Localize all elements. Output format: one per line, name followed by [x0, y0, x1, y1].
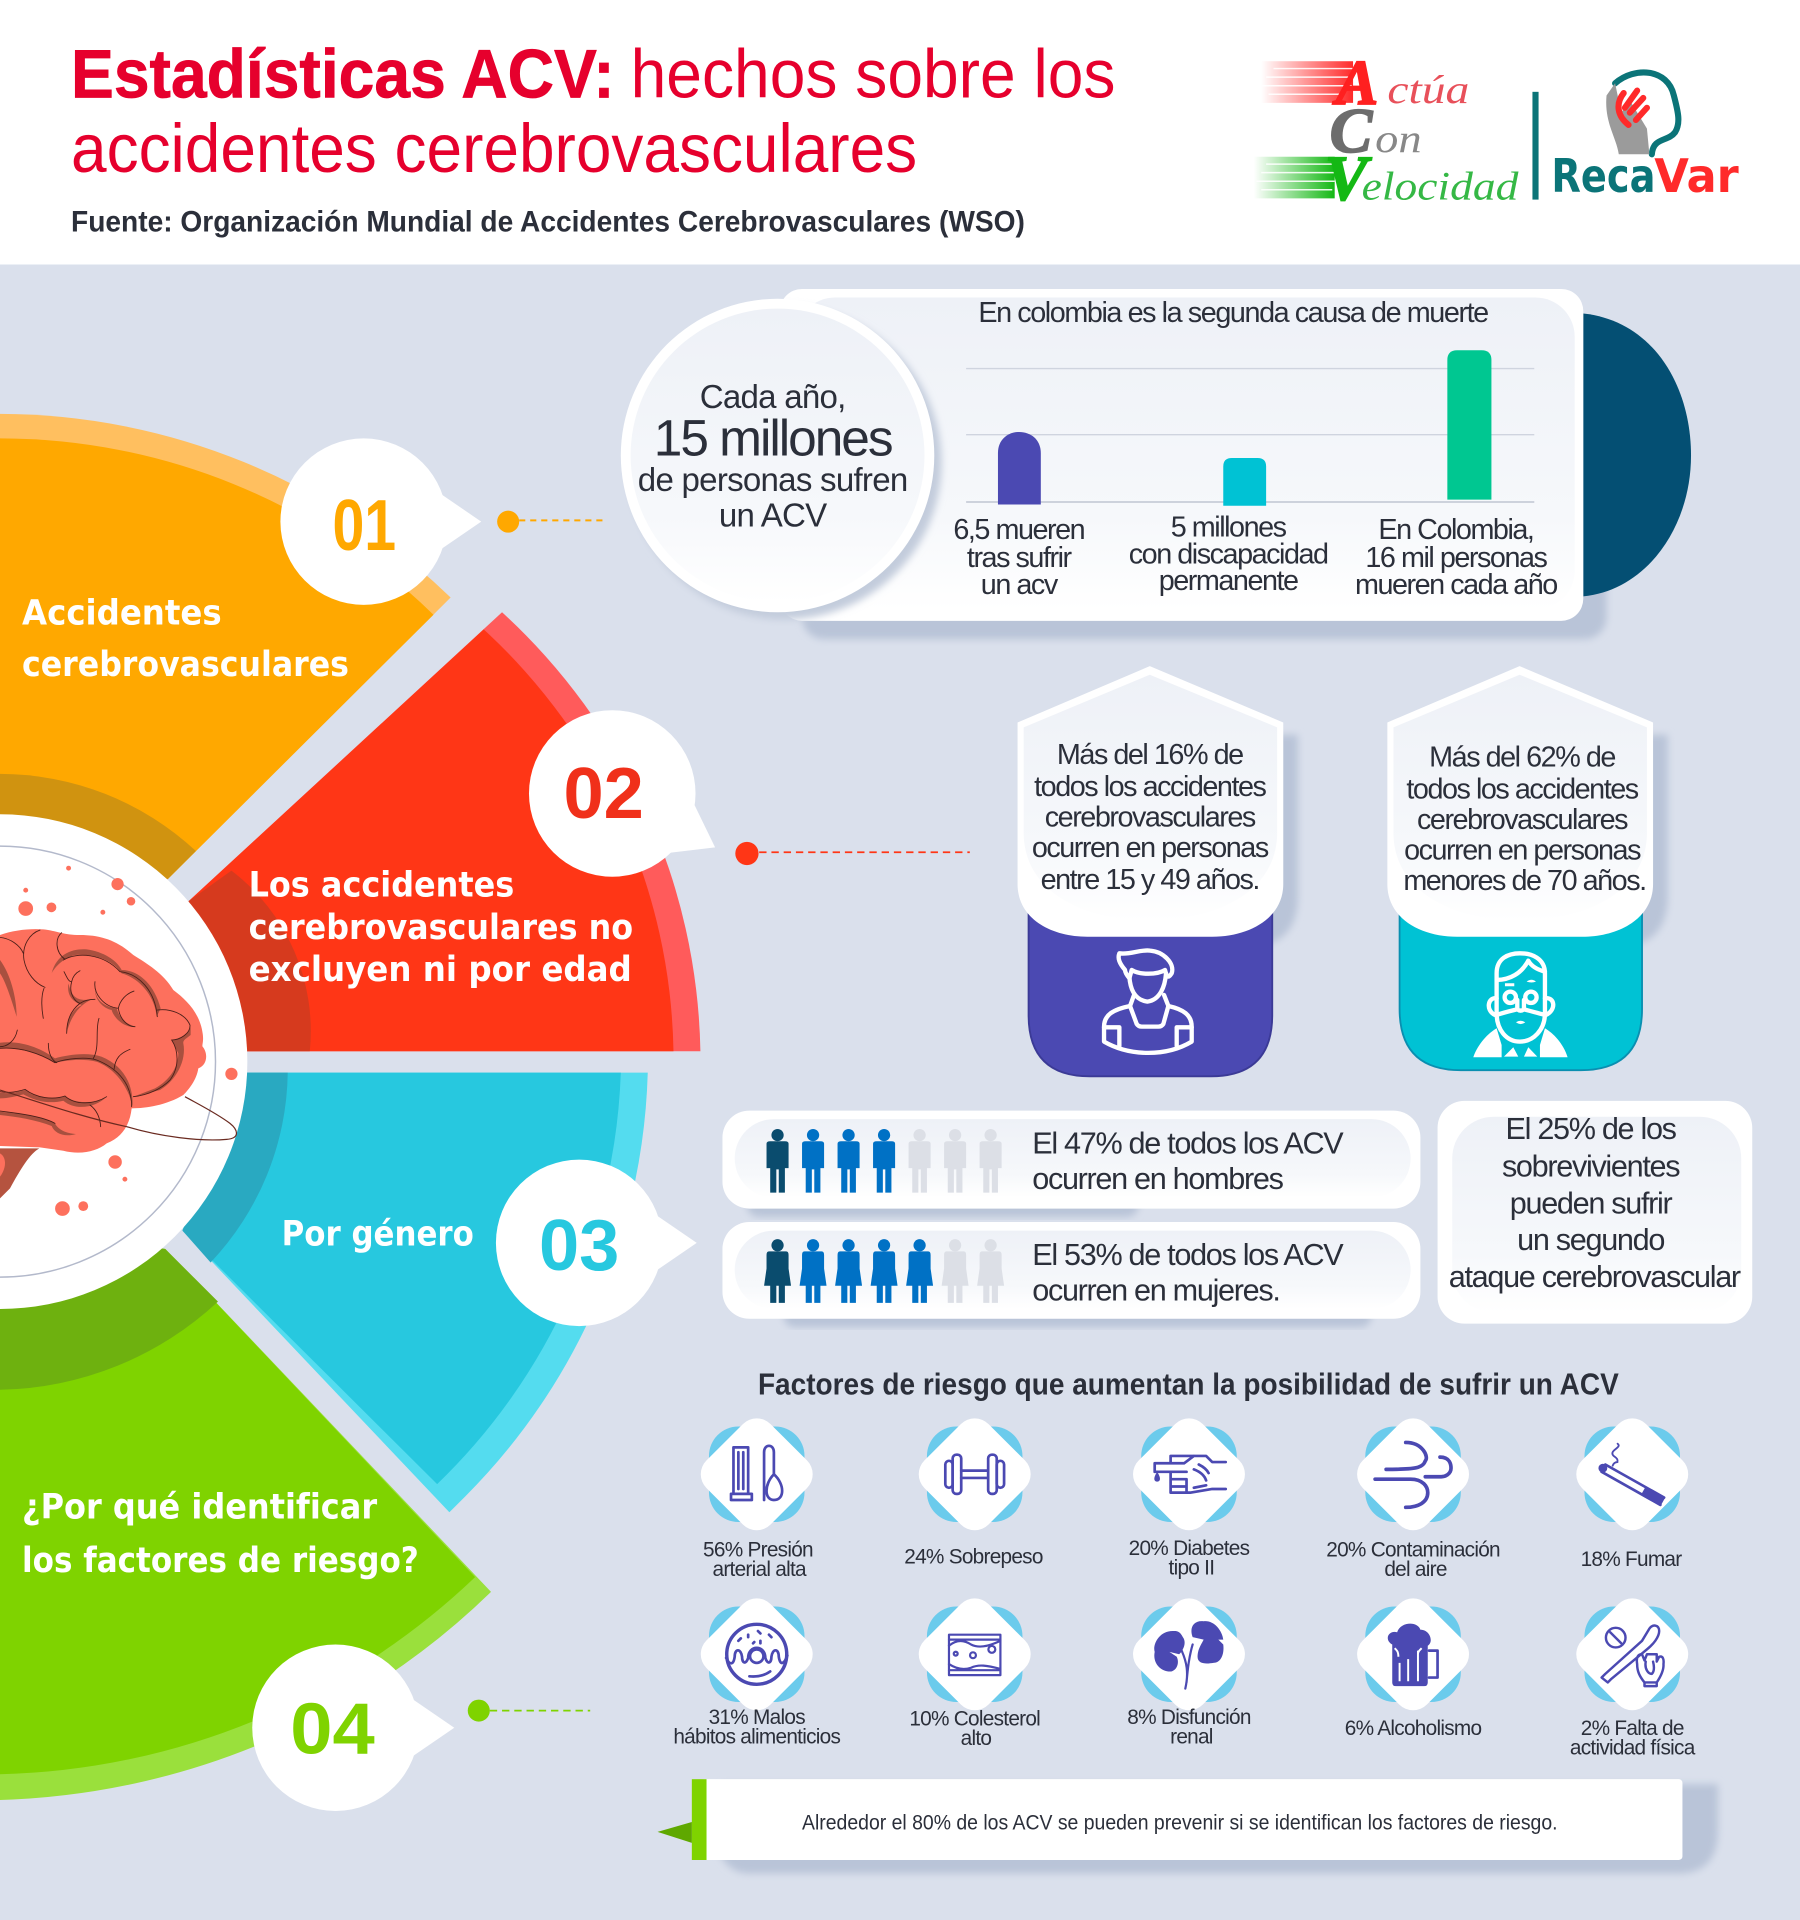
- bar label 3: En Colombia,: [1378, 514, 1533, 546]
- icon: bat ball glove: [1602, 1626, 1664, 1686]
- bar label 1: un acv: [981, 569, 1059, 601]
- panel: survivors 25%: [1438, 1101, 1752, 1324]
- risk factor: blood pressure: 56% Presión: [703, 1538, 813, 1561]
- icon: donut: [726, 1624, 787, 1684]
- text: men: El 47% de todos los ACV: [1032, 1126, 1342, 1160]
- icon: dumbbell: [945, 1455, 1004, 1494]
- connector 01: [497, 511, 605, 533]
- panel: survivors 25%: pueden sufrir: [1510, 1186, 1673, 1220]
- logo: RecaVar: Var: [1654, 149, 1739, 203]
- hexagon text card: Más del 16% de: [1057, 739, 1243, 771]
- panel: men 47%: [722, 1111, 1420, 1217]
- bar label 3: 16 mil personas: [1365, 542, 1548, 574]
- circle: 15 millones: 15 millones: [654, 409, 892, 467]
- risk factor: diabetes: [1125, 1410, 1253, 1580]
- chart heading: En colombia es la segunda causa de muerte: [978, 297, 1488, 329]
- badge 04: 04: [290, 1689, 375, 1769]
- teal icon tile: [1400, 900, 1642, 1070]
- risk factor: bad diet: hábitos alimenticios: [673, 1726, 840, 1749]
- hexagon text card: todos los accidentes: [1034, 771, 1267, 803]
- pictogram: men: [767, 1129, 1002, 1193]
- risk factor: air pollution: [1326, 1410, 1500, 1581]
- bar label 2: permanente: [1159, 565, 1298, 597]
- badge 02: 02: [563, 754, 644, 834]
- circle: 15 millones: un ACV: [719, 498, 827, 535]
- central brain medallion: [0, 814, 247, 1309]
- pictogram: women: [764, 1239, 1004, 1303]
- sector 02 red: [189, 612, 700, 1051]
- risk factor: smoking: 18% Fumar: [1581, 1548, 1682, 1571]
- sector 04 label: ¿Por qué identificar: [22, 1487, 377, 1527]
- risk factor: inactivity: 2% Falta de: [1581, 1717, 1684, 1740]
- hexagon text card: Más del 62% de: [1429, 742, 1615, 774]
- panel: survivors 25%: sobrevivientes: [1502, 1150, 1680, 1184]
- hexagon text card: [1018, 666, 1283, 937]
- hexagon text card: todos los accidentes: [1406, 773, 1639, 805]
- icon: finger blood drop: [1154, 1456, 1226, 1493]
- risk factor: renal dysfunction: renal: [1170, 1726, 1213, 1749]
- sector 03 label: Por género: [282, 1214, 474, 1254]
- text: women: El 53% de todos los ACV: [1032, 1238, 1342, 1272]
- callout: prevention: Alrededor el 80% de los ACV se pueden prevenir si se identifican los factores de riesgo.: [802, 1811, 1558, 1834]
- hexagon text card: cerebrovasculares: [1045, 802, 1256, 834]
- risk factor: blood pressure: [693, 1410, 821, 1581]
- circle: 15 millones: de personas sufren: [638, 462, 908, 499]
- badge 03: [496, 1160, 697, 1326]
- badge 03: 03: [539, 1206, 619, 1286]
- risk factor: overweight: [904, 1410, 1043, 1569]
- badge 01: [280, 438, 481, 605]
- sector 01 label: cerebrovasculares: [22, 645, 349, 685]
- panel: statistics chart: [621, 289, 1691, 639]
- title: hechos sobre los: [631, 35, 1116, 112]
- sector 04 label: los factores de riesgo?: [22, 1541, 419, 1581]
- icon: sphygmomanometer: [731, 1446, 782, 1500]
- circle: 15 millones: Cada año,: [700, 379, 846, 416]
- logo: RecaVar: Reca: [1551, 149, 1656, 203]
- bar chart: [966, 350, 1534, 506]
- connector 02: [735, 842, 970, 865]
- callout: prevention: [658, 1779, 1718, 1873]
- text: men: ocurren en hombres: [1032, 1162, 1284, 1196]
- hexagon text card: ocurren en personas: [1032, 832, 1269, 864]
- panel: survivors 25%: un segundo: [1517, 1223, 1664, 1257]
- sector 02 label: [249, 865, 633, 990]
- risk factor: alcoholism: [1345, 1590, 1481, 1740]
- blood drops: [18, 866, 238, 1216]
- badge 04: [252, 1644, 454, 1811]
- risk factor: diabetes: tipo II: [1169, 1557, 1214, 1580]
- hexagon text card: cerebrovasculares: [1417, 804, 1628, 836]
- circle: 15 millones: [621, 299, 942, 620]
- sector 04 green: [0, 1224, 491, 1800]
- risk factor: smoking: [1568, 1410, 1696, 1571]
- header band: [0, 0, 1800, 264]
- icon: cigarette: [1598, 1444, 1665, 1506]
- risk factor: alcoholism: 6% Alcoholismo: [1345, 1717, 1481, 1740]
- risk factor: cholesterol: 10% Colesterol: [909, 1707, 1040, 1730]
- risk factor: inactivity: actividad física: [1570, 1737, 1696, 1760]
- logo: Actúa con velocidad: C: [1330, 95, 1374, 166]
- sector 03 cyan: [182, 1073, 648, 1512]
- panel: age 15-49: [1018, 666, 1298, 1076]
- logo: RecaVar: [1551, 72, 1739, 203]
- risk factor: diabetes: 20% Diabetes: [1129, 1537, 1249, 1560]
- logo divider: [1532, 92, 1539, 200]
- risk factor: air pollution: del aire: [1384, 1558, 1447, 1581]
- logo: Actúa con velocidad: V: [1325, 143, 1372, 214]
- bar label 2: con discapacidad: [1129, 538, 1328, 570]
- title: [71, 35, 1116, 187]
- icon: old man: [1473, 953, 1568, 1057]
- icon: wind: [1375, 1442, 1451, 1507]
- risk factor: renal dysfunction: 8% Disfunción: [1127, 1706, 1251, 1729]
- badge 01: 01: [332, 486, 396, 566]
- sector 01 label: [22, 593, 349, 685]
- hexagon text card: ocurren en personas: [1404, 835, 1641, 867]
- brain: [0, 929, 236, 1198]
- risk factor: blood pressure: arterial alta: [713, 1558, 807, 1581]
- icon: young man: [1104, 950, 1192, 1053]
- connector 04: [468, 1700, 590, 1722]
- icon: beer mug: [1388, 1624, 1438, 1686]
- hexagon text card: [1387, 666, 1653, 937]
- risk factor: bad diet: [673, 1590, 840, 1749]
- sector 02 label: cerebrovasculares no: [249, 908, 633, 948]
- risk factor: air pollution: 20% Contaminación: [1326, 1538, 1500, 1561]
- sector 02 label: excluyen ni por edad: [249, 950, 632, 990]
- source line: Fuente: Organización Mundial de Accidentes Cerebrovasculares (WSO): [71, 205, 1025, 238]
- title: Estadísticas ACV:: [71, 35, 615, 112]
- panel: survivors 25%: ataque cerebrovascular: [1449, 1260, 1741, 1294]
- risk factor: renal dysfunction: [1125, 1590, 1253, 1749]
- title: accidentes cerebrovasculares: [71, 110, 917, 187]
- panel: survivors 25%: El 25% de los: [1506, 1112, 1676, 1146]
- heading: risk factors: Factores de riesgo que aumentan la posibilidad de sufrir un ACV: [758, 1368, 1619, 1402]
- panel: age under 70: [1387, 666, 1668, 1070]
- sector 04 label: [22, 1487, 419, 1581]
- bar label 3: mueren cada año: [1355, 569, 1557, 601]
- risk factor: bad diet: 31% Malos: [709, 1706, 805, 1729]
- risk factor: inactivity: [1568, 1590, 1696, 1760]
- logo: Actúa con velocidad: [1254, 47, 1519, 214]
- bar label 1: 6,5 mueren: [953, 514, 1084, 546]
- panel: women 53%: [722, 1222, 1420, 1327]
- sector 01 label: Accidentes: [22, 593, 222, 633]
- logo: Actúa con velocidad: elocidad: [1362, 164, 1519, 209]
- bar label 2: 5 millones: [1171, 511, 1286, 543]
- logo: Actúa con velocidad: ctúa: [1387, 67, 1469, 112]
- risk factor: overweight: 24% Sobrepeso: [904, 1546, 1043, 1569]
- sector 01 orange: [0, 414, 451, 879]
- risk factor: cholesterol: [909, 1590, 1040, 1750]
- hexagon text card: entre 15 y 49 años.: [1041, 864, 1259, 896]
- logo: Actúa con velocidad: A: [1332, 47, 1378, 118]
- icon: artery plaque: [949, 1635, 1000, 1675]
- risk factor: cholesterol: alto: [961, 1727, 991, 1750]
- sector 02 label: Los accidentes: [249, 865, 514, 905]
- icon: kidneys: [1154, 1621, 1223, 1689]
- logo: Actúa con velocidad: on: [1375, 116, 1422, 161]
- badge 02: [529, 710, 715, 877]
- bar label 1: tras sufrir: [967, 542, 1073, 574]
- hexagon text card: menores de 70 años.: [1403, 865, 1646, 897]
- text: women: ocurren en mujeres.: [1032, 1273, 1280, 1307]
- purple icon tile: [1029, 900, 1272, 1076]
